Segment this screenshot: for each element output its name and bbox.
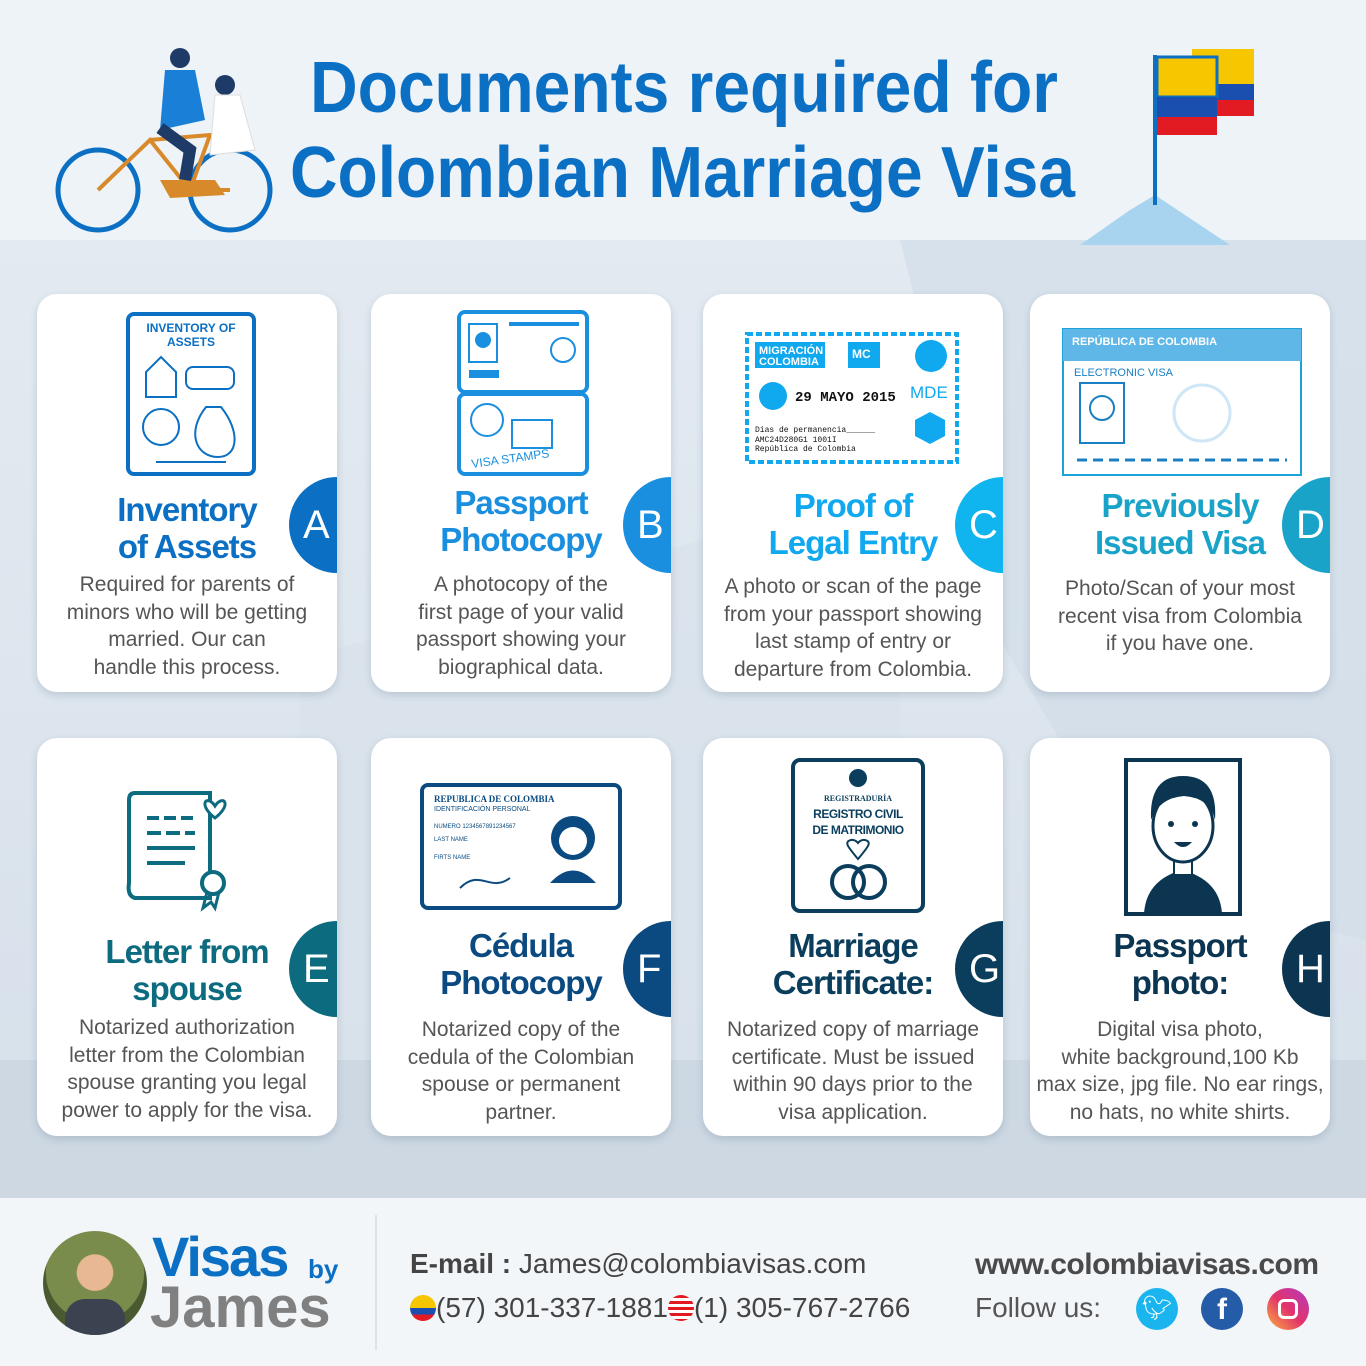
- title H: [1113, 927, 1248, 1001]
- body G: visa application.: [778, 1100, 928, 1124]
- icon: passport: [457, 310, 589, 476]
- card E: [37, 738, 337, 1136]
- icon: entry stamp: MIGRACIÓN: [759, 344, 823, 357]
- badge D: D: [1296, 503, 1325, 547]
- body E: Notarized authorization: [79, 1016, 295, 1039]
- body A: Required for parents of: [80, 573, 294, 596]
- icon: entry stamp: [745, 332, 959, 464]
- body E: [62, 1016, 312, 1122]
- title D: [1095, 487, 1266, 561]
- card D: [1030, 294, 1330, 692]
- footer: contact: (57) 301-337-1881 (1) 305-767-2766: [436, 1292, 910, 1323]
- icon: passport: VISA STAMPS: [470, 446, 550, 471]
- badge E: [289, 921, 385, 1017]
- title A: [117, 491, 258, 565]
- title G: Certificate:: [773, 964, 933, 1001]
- footer: logo: James: [150, 1275, 331, 1340]
- body F: Notarized copy of the: [422, 1018, 620, 1041]
- body E: power to apply for the visa.: [62, 1098, 312, 1122]
- icon: cedula: FIRTS NAME: [434, 855, 470, 861]
- icon: cedula: NUMERO 1234567891234567: [434, 824, 516, 830]
- body G: [727, 1018, 979, 1124]
- body C: [724, 575, 982, 680]
- badge G: G: [969, 947, 1000, 991]
- icon: marriage certificate: [791, 758, 925, 913]
- body G: within 90 days prior to the: [733, 1073, 973, 1096]
- icon: letter: [126, 791, 227, 912]
- icon: entry stamp: COLOMBIA: [759, 356, 819, 368]
- icon: cedula: IDENTIFICACIÓN PERSONAL: [434, 804, 531, 813]
- body D: [1058, 577, 1302, 655]
- badge F: [623, 921, 719, 1017]
- badge D: [1282, 477, 1366, 573]
- card G: [703, 738, 1003, 1136]
- title: [290, 48, 1076, 213]
- body A: married. Our can: [108, 628, 266, 651]
- title B: Photocopy: [440, 521, 602, 558]
- icon: facebook: [1201, 1288, 1243, 1330]
- body A: [67, 573, 307, 678]
- footer: website and social: [974, 1248, 1319, 1330]
- body A: handle this process.: [94, 656, 280, 678]
- footer: logo: [150, 1225, 338, 1340]
- footer: logo: Visas: [152, 1225, 287, 1288]
- body F: cedula of the Colombian: [408, 1046, 634, 1068]
- card C: [703, 294, 1003, 692]
- title H: Passport: [1113, 927, 1247, 964]
- body H: white background,100 Kb: [1062, 1046, 1298, 1068]
- body D: Photo/Scan of your most: [1065, 577, 1295, 600]
- icon: couple on bicycle: [56, 48, 272, 232]
- body G: certificate. Must be issued: [732, 1046, 974, 1068]
- body C: last stamp of entry or: [755, 630, 951, 653]
- title C: Proof of: [794, 487, 912, 524]
- icon: entry stamp: República de Colombia: [755, 445, 856, 454]
- badge H: [1282, 921, 1366, 1017]
- body D: if you have one.: [1106, 632, 1254, 655]
- body B: first page of your valid: [418, 600, 624, 624]
- title: Documents required for: [310, 48, 1058, 128]
- body H: [1036, 1018, 1324, 1124]
- card A: [37, 294, 337, 692]
- badge F: F: [637, 947, 661, 991]
- badge E: E: [303, 947, 330, 991]
- body B: A photocopy of the: [434, 573, 608, 596]
- body H: Digital visa photo,: [1097, 1018, 1263, 1041]
- background band: [0, 240, 1366, 1198]
- title H: photo:: [1132, 964, 1228, 1001]
- icon: entry stamp: 29 MAYO 2015: [795, 390, 896, 406]
- icon: inventory of assets: ASSETS: [167, 335, 215, 349]
- icon: electronic visa: [1062, 328, 1302, 476]
- title D: Issued Visa: [1095, 524, 1265, 561]
- icon: electronic visa: REPÚBLICA DE COLOMBIA: [1072, 335, 1217, 348]
- title G: [773, 927, 933, 1001]
- body D: recent visa from Colombia: [1058, 604, 1302, 628]
- footer: logo: by: [308, 1254, 338, 1284]
- footer: website and social: Follow us:: [975, 1292, 1101, 1323]
- title G: Marriage: [788, 927, 918, 964]
- body E: letter from the Colombian: [69, 1044, 305, 1066]
- body C: from your passport showing: [724, 602, 982, 626]
- icon: twitter: [1136, 1288, 1178, 1330]
- badge B: B: [637, 503, 664, 547]
- icon: facebook: f: [1217, 1293, 1227, 1326]
- icon: passport photo: [1124, 758, 1242, 916]
- title A: of Assets: [118, 528, 256, 565]
- card B: [371, 294, 671, 692]
- title E: [105, 933, 269, 1007]
- title C: Legal Entry: [769, 524, 937, 561]
- icon: entry stamp: Dias de permanencia______: [755, 426, 875, 435]
- icon: twitter: 🐦︎: [1142, 1295, 1172, 1322]
- title F: Photocopy: [440, 964, 602, 1001]
- icon: marriage certificate: DE MATRIMONIO: [812, 823, 904, 837]
- title F: [440, 927, 602, 1001]
- title A: Inventory: [117, 491, 257, 528]
- body G: Notarized copy of marriage: [727, 1018, 979, 1041]
- icon: inventory of assets: INVENTORY OF: [146, 321, 236, 335]
- title F: Cédula: [469, 927, 573, 964]
- footer: contact: E-mail : James@colombiavisas.com: [410, 1248, 866, 1279]
- badge C: C: [969, 503, 998, 547]
- card H: [1030, 738, 1330, 1136]
- body E: spouse granting you legal: [67, 1071, 307, 1094]
- icon: electronic visa: ELECTRONIC VISA: [1074, 367, 1174, 379]
- title: Colombian Marriage Visa: [290, 133, 1076, 213]
- body H: max size, jpg file. No ear rings,: [1036, 1073, 1324, 1096]
- icon: marriage certificate: REGISTRADURÍA: [824, 793, 892, 803]
- body F: [408, 1018, 634, 1124]
- icon: Colombian flag on mountain: [1080, 49, 1254, 245]
- icon: cedula: REPUBLICA DE COLOMBIA: [434, 794, 555, 804]
- icon: entry stamp: MC: [852, 347, 871, 361]
- title C: [769, 487, 938, 561]
- body F: partner.: [485, 1100, 557, 1124]
- badge B: [623, 477, 719, 573]
- title E: Letter from: [105, 933, 269, 970]
- badge C: [955, 477, 1051, 573]
- body A: minors who will be getting: [67, 600, 307, 624]
- footer: website and social: www.colombiavisas.com: [975, 1248, 1319, 1281]
- badge H: H: [1296, 947, 1325, 991]
- title B: [440, 484, 602, 558]
- icon: cedula: [420, 783, 622, 910]
- body F: spouse or permanent: [422, 1073, 620, 1096]
- icon: inventory of assets: [126, 312, 256, 476]
- body B: [416, 573, 626, 678]
- title D: Previously: [1102, 487, 1258, 524]
- body B: biographical data.: [438, 656, 604, 678]
- badge A: A: [303, 503, 330, 547]
- icon: cedula: LAST NAME: [434, 837, 468, 843]
- icon: entry stamp: MDE: [910, 383, 948, 402]
- body C: A photo or scan of the page: [725, 575, 981, 598]
- title B: Passport: [454, 484, 588, 521]
- icon: instagram: [1267, 1288, 1309, 1330]
- footer: profile photo: [43, 1231, 147, 1335]
- card F: [371, 738, 671, 1136]
- title E: spouse: [132, 970, 242, 1007]
- footer: contact: [410, 1248, 910, 1323]
- body C: departure from Colombia.: [734, 658, 972, 680]
- icon: marriage certificate: REGISTRO CIVIL: [813, 807, 903, 821]
- body H: no hats, no white shirts.: [1070, 1100, 1290, 1124]
- badge A: [289, 477, 385, 573]
- footer background: [0, 1198, 1366, 1366]
- body B: passport showing your: [416, 628, 626, 651]
- badge G: [955, 921, 1051, 1017]
- icon: entry stamp: AMC24D280G1 1001I: [755, 436, 837, 445]
